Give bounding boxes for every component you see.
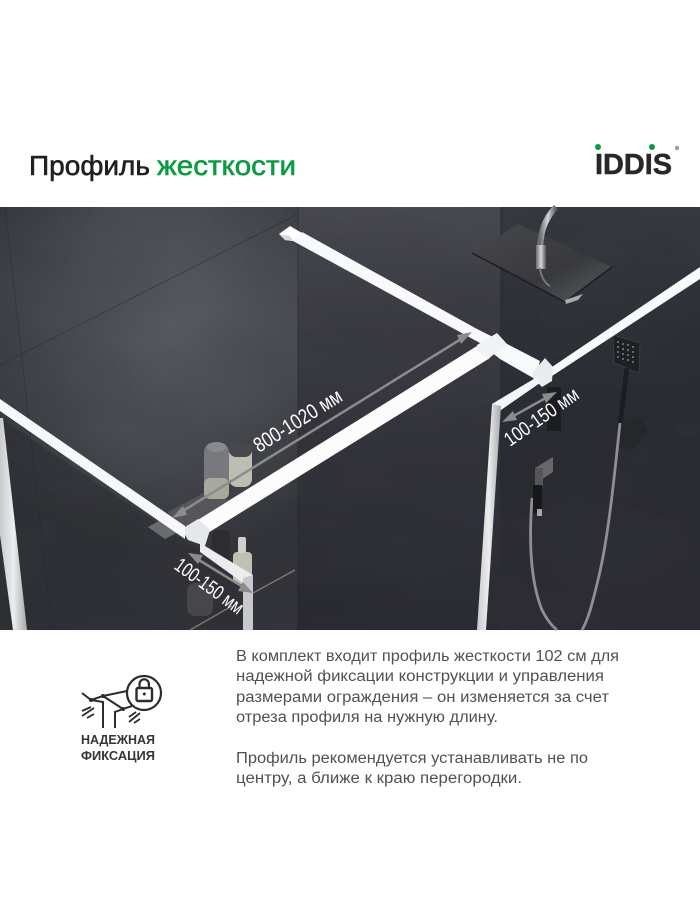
hand shower and hose [531,335,648,630]
dimension label: right 100-150 mm: 100-150 мм [500,384,583,451]
dimension arrow: left 100-150 mm [188,553,253,593]
wall tiles [0,207,700,630]
description paragraph 1: отреза профиля на нужную длину. [236,709,498,726]
title: Профиль [29,150,150,181]
stiffening profile bar, front [185,346,490,545]
shelf with bottles [148,442,295,630]
description paragraph 2: Профиль рекомендуется устанавливать не по [236,750,588,767]
logo: IDDIS: IDDIS [595,149,672,181]
stiffening profile bar, rear [279,226,540,379]
left glass panel frame [0,399,185,630]
icon caption: ФИКСАЦИЯ [81,749,155,763]
right glass panel frame [477,267,700,630]
dimension label: left 100-150 mm: 100-150 мм [170,554,248,619]
dimension arrow: right 100-150 mm [502,392,557,422]
description paragraph 1: надежной фиксации конструкции и управления [236,668,604,685]
icon caption [81,733,155,763]
rain shower head [472,207,612,304]
description paragraph 2 [236,750,588,787]
shower enclosure photo [0,207,700,630]
icon: reliable fixation lock [82,676,161,728]
description paragraph 1 [236,648,619,726]
icon caption: НАДЕЖНАЯ [81,733,155,747]
description paragraph 2: центру, а ближе к краю перегородки. [236,770,522,787]
title: жесткости [157,150,296,181]
title [29,150,296,181]
connector clamps [185,333,553,546]
dimension label: 800-1020 mm: 800-1020 мм [249,385,346,457]
short corner frame, left [200,543,253,630]
description paragraph 1: В комплект входит профиль жесткости 102 см для [236,648,619,665]
dimension arrow: 800-1020 mm [172,332,472,518]
description paragraph 1: размерами ограждения – он изменяется за счет [236,689,609,706]
